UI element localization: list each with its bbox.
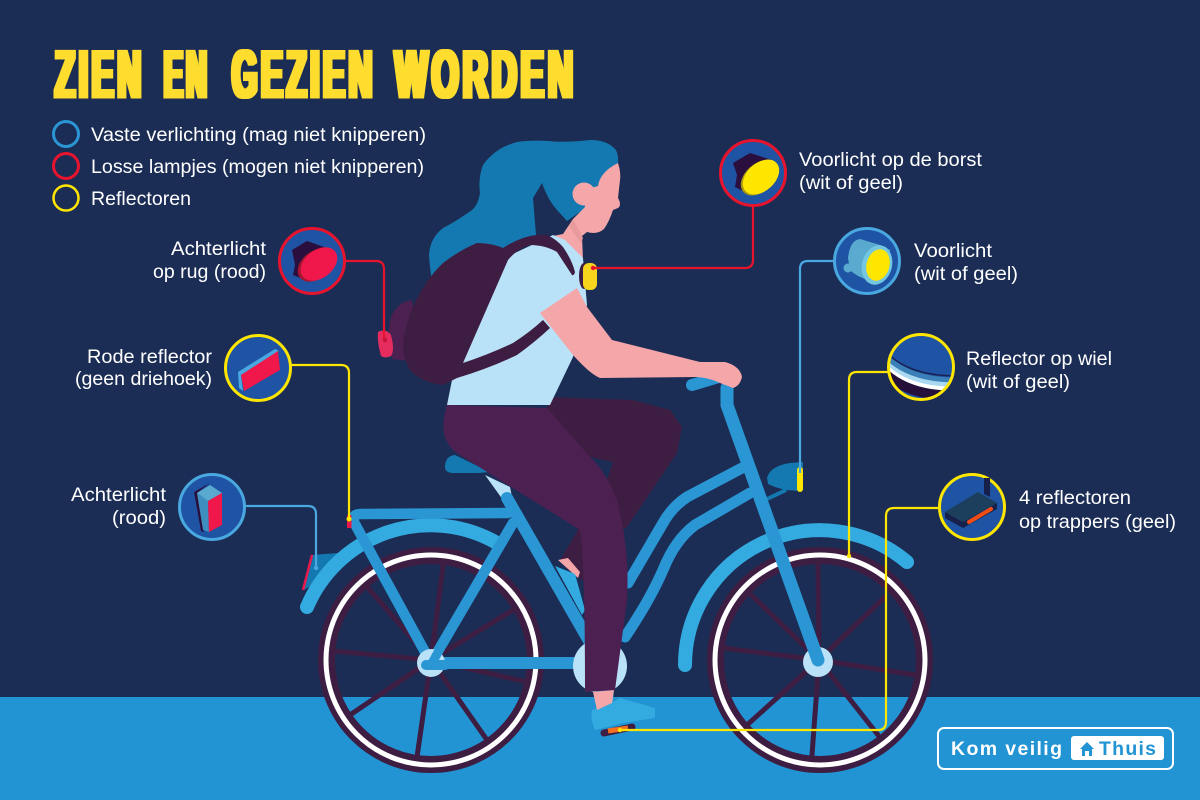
callout: voorlicht op de borst: Voorlicht op de borst — [799, 149, 983, 171]
legend: Reflectoren — [91, 188, 191, 210]
seat — [445, 455, 512, 500]
side pouch — [389, 300, 420, 362]
callout: voorlicht op de borst: (wit of geel) — [799, 172, 903, 194]
title: EN — [164, 36, 210, 112]
callout: reflector op wiel — [847, 334, 1112, 558]
callout: 4 reflectoren op trappers — [618, 474, 1176, 732]
callout: rode reflector: Rode reflector — [87, 346, 213, 368]
callout: reflector op wiel: Reflector op wiel — [966, 348, 1112, 370]
far leg and foot — [547, 397, 682, 615]
callout: achterlicht op rug — [153, 228, 387, 342]
rear wheel — [326, 555, 536, 765]
legend: Vaste verlichting (mag niet knipperen) — [91, 124, 426, 146]
pedal — [604, 727, 632, 733]
near leg and foot — [443, 405, 655, 730]
backpack — [403, 235, 575, 385]
callout: voorlicht op de borst — [591, 140, 983, 270]
title: GEZIEN — [232, 36, 376, 112]
title: ZIEN — [55, 36, 145, 112]
title: WORDEN — [395, 36, 577, 112]
callout: voorlicht — [800, 228, 1018, 473]
front wheel — [715, 555, 925, 765]
callout: achterlicht rood: Achterlicht — [71, 484, 167, 506]
title — [55, 36, 577, 112]
head and neck — [553, 163, 620, 270]
rear reflector — [347, 515, 352, 528]
logo: Kom veilig Thuis: Kom veilig — [951, 738, 1062, 760]
arm and hand — [540, 288, 742, 388]
callout: achterlicht op rug: op rug (rood) — [153, 261, 266, 283]
logo: Kom veilig Thuis: Thuis — [1099, 738, 1156, 760]
mudguards — [307, 525, 907, 665]
rear light on mudguard — [303, 553, 338, 590]
callout: achterlicht rood: (rood) — [112, 507, 166, 529]
bicycle frame — [353, 468, 750, 663]
ground band — [0, 697, 1200, 800]
callout: voorlicht: Voorlicht — [914, 240, 993, 262]
callout: achterlicht rood — [71, 474, 318, 570]
callout: voorlicht: (wit of geel) — [914, 263, 1018, 285]
rear lamp on backpack — [378, 331, 393, 358]
logo: Kom veilig Thuis — [938, 728, 1173, 769]
hair — [429, 140, 618, 280]
front light bracket — [765, 462, 803, 500]
callout: rode reflector — [75, 336, 352, 522]
callout: 4 reflectoren op trappers: op trappers (geel) — [1019, 511, 1176, 533]
shirt — [447, 235, 587, 405]
legend: Losse lampjes (mogen niet knipperen) — [91, 156, 424, 178]
rear hub — [417, 645, 445, 677]
callout: achterlicht op rug: Achterlicht — [171, 238, 267, 260]
fork and handlebar — [692, 376, 833, 677]
bottom bracket — [573, 639, 627, 693]
legend — [54, 122, 426, 210]
chest light — [579, 263, 597, 290]
callout: 4 reflectoren op trappers: 4 reflectoren — [1019, 487, 1131, 509]
callout: rode reflector: (geen driehoek) — [75, 368, 212, 390]
callout: reflector op wiel: (wit of geel) — [966, 371, 1070, 393]
